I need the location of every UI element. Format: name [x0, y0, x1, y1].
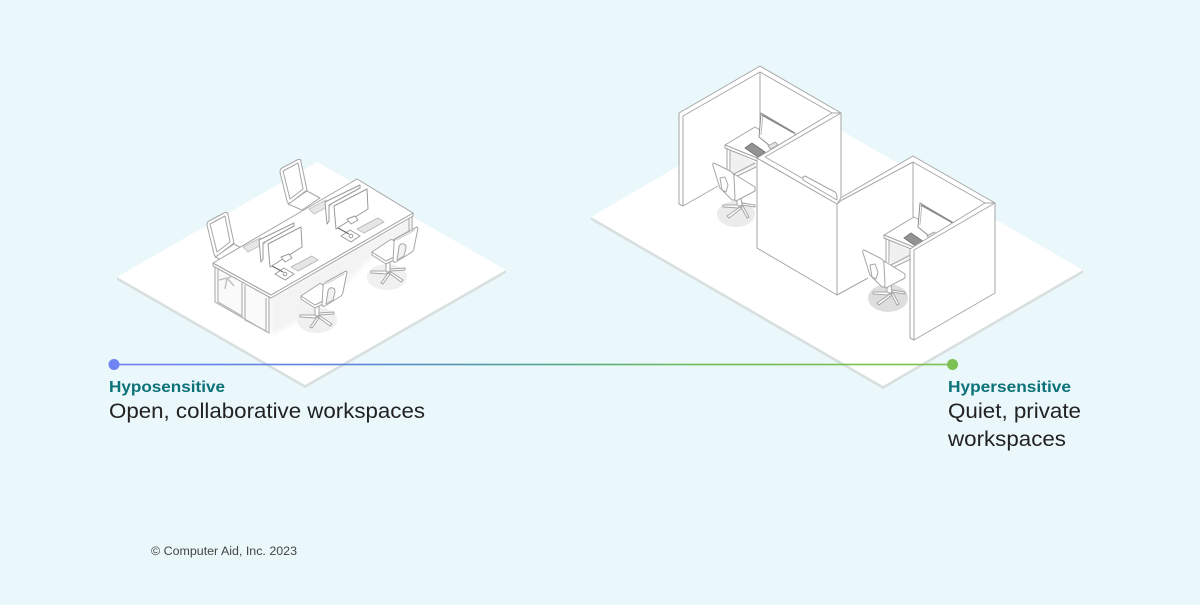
- desk frame: [215, 215, 412, 333]
- cubicle 2 chair mat: [868, 284, 908, 312]
- chair: front row left: [300, 271, 347, 328]
- chair: front row right base mat: [367, 264, 407, 290]
- cubicle 1 chair mat: [717, 201, 755, 227]
- label: hypersensitive: Quiet, private: [948, 400, 1081, 423]
- workstation: far end: [309, 185, 384, 242]
- cubicle 1 back walls: [683, 72, 841, 248]
- cubicle 2 back walls: [837, 162, 995, 340]
- cubicle 2 chair: [863, 250, 905, 305]
- chair: back row right: [280, 159, 320, 210]
- cubicle 2 desk: [884, 203, 954, 268]
- cubicle 1 desk: [725, 113, 795, 178]
- spectrum line: [108, 359, 958, 370]
- desk shadow: [271, 216, 413, 335]
- central partition block: [757, 113, 841, 295]
- label: hyposensitive: Open, collaborative workspaces: [109, 400, 425, 423]
- marker: hyposensitive: [108, 359, 120, 370]
- label: hypersensitive: workspaces: [947, 428, 1066, 451]
- workstation: near end: [243, 223, 318, 280]
- chair: front row right: [371, 227, 418, 284]
- copyright: © Computer Aid, Inc. 2023: [151, 546, 297, 558]
- label: hyposensitive: [109, 379, 425, 423]
- chair: front row left base mat: [297, 307, 337, 333]
- label: hypersensitive: [947, 379, 1081, 451]
- cubicle 1 wall caps: [679, 66, 841, 206]
- left floor platform: [117, 162, 506, 388]
- desk top: [213, 179, 413, 298]
- right scene: private cubicles: [591, 66, 1083, 389]
- left scene: open collaborative desks: [117, 159, 506, 388]
- right floor platform: [591, 101, 1083, 389]
- label: hyposensitive: Hyposensitive: [109, 379, 225, 396]
- label: hypersensitive: Hypersensitive: [948, 379, 1071, 396]
- cubicle 1 chair: [713, 163, 755, 218]
- marker: hypersensitive: [947, 359, 958, 370]
- cubicle 2 front wall: [837, 156, 995, 340]
- chair: back row left: [207, 212, 247, 263]
